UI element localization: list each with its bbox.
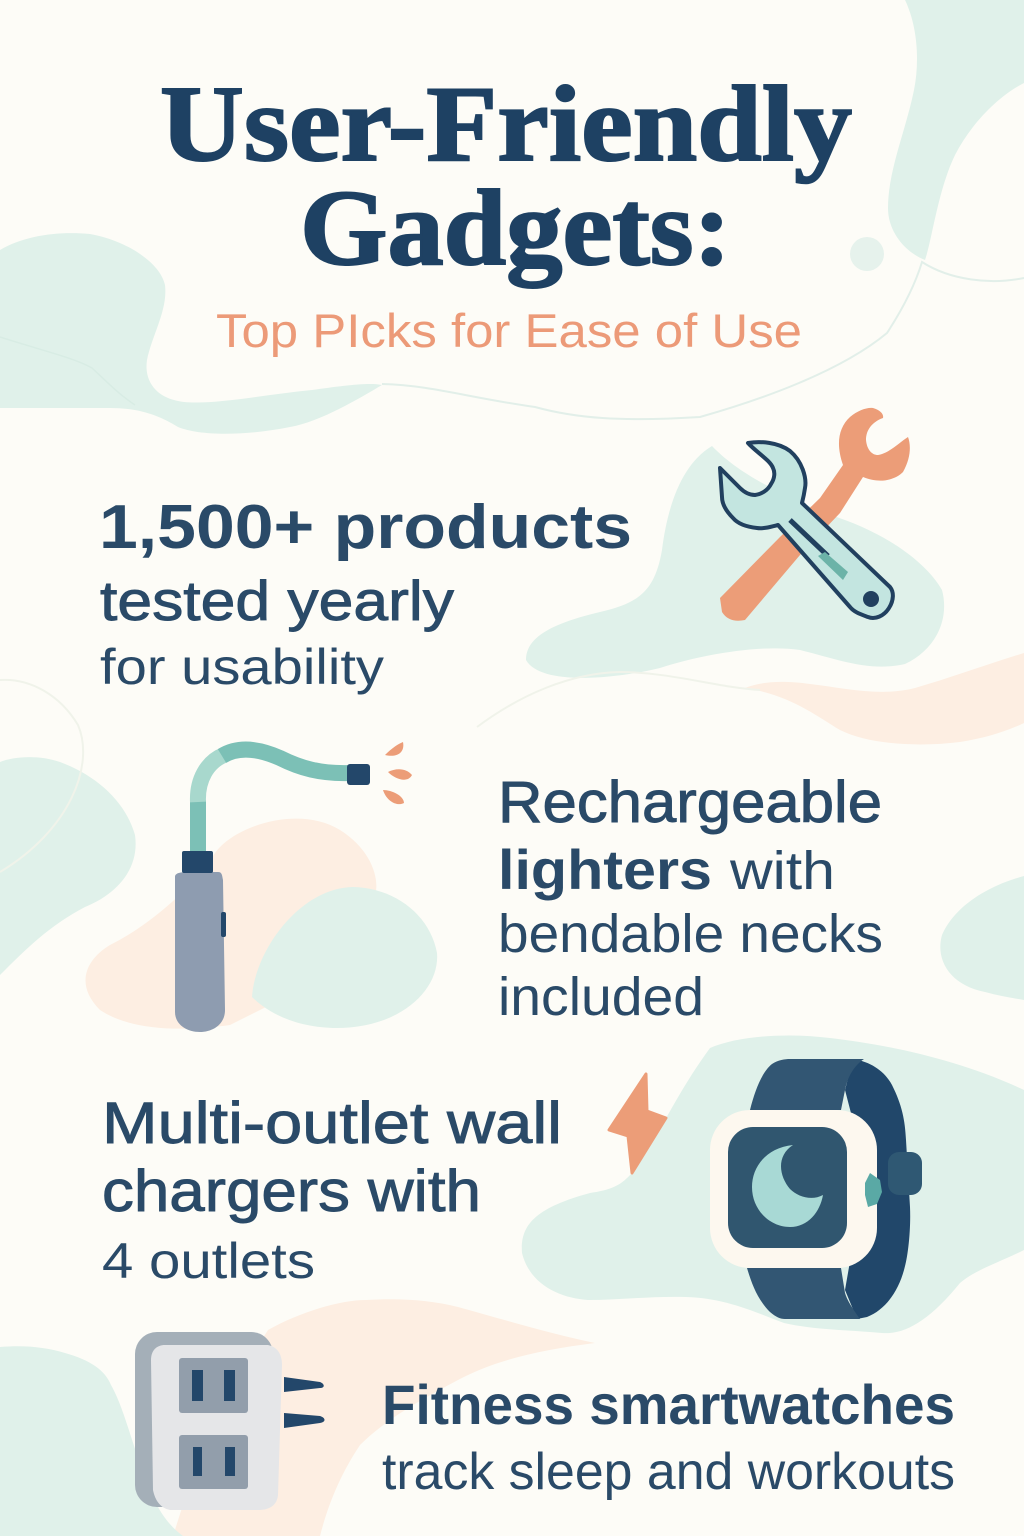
socket slots xyxy=(192,1370,235,1476)
text block: products tested: tested yearly xyxy=(100,569,454,632)
charger front xyxy=(151,1345,282,1510)
title: Gadgets: xyxy=(300,169,731,288)
collar xyxy=(182,851,213,873)
charger back xyxy=(135,1332,273,1507)
handle xyxy=(175,872,225,1032)
lighter tip xyxy=(347,764,370,785)
text block: multi-outlet chargers: Multi-outlet wall xyxy=(102,1091,562,1156)
text block: fitness smartwatches: Fitness smartwatches xyxy=(382,1373,955,1436)
watch screen xyxy=(728,1127,847,1248)
text block: products tested xyxy=(99,493,632,695)
icon: smartwatch xyxy=(710,1059,922,1319)
text block: products tested: 1,500+ products xyxy=(99,493,632,562)
strap back xyxy=(845,1059,910,1319)
text block: fitness smartwatches: track sleep and workouts xyxy=(382,1443,955,1501)
bottom socket xyxy=(179,1435,248,1489)
title xyxy=(160,65,852,288)
text block: rechargeable lighters: with xyxy=(729,841,835,901)
top socket xyxy=(179,1358,248,1413)
subtitle: Top PIcks for Ease of Use xyxy=(216,304,802,357)
orange wrench xyxy=(720,408,910,621)
icon: crossed wrenches xyxy=(720,408,910,621)
text block: rechargeable lighters: lighters xyxy=(498,838,712,901)
button xyxy=(221,912,226,937)
text block: fitness smartwatches xyxy=(382,1373,955,1501)
text block: rechargeable lighters xyxy=(498,770,883,1027)
text block: rechargeable lighters: Rechargeable xyxy=(498,770,882,835)
text block: multi-outlet chargers: chargers with xyxy=(102,1159,481,1224)
sparks xyxy=(383,742,412,804)
strap top xyxy=(750,1059,864,1110)
side button xyxy=(865,1173,882,1207)
moon xyxy=(752,1145,823,1227)
icon: rechargeable lighter xyxy=(175,742,412,1032)
crown xyxy=(888,1152,922,1195)
strap bottom xyxy=(747,1268,860,1319)
watch case xyxy=(710,1110,877,1268)
icon: lightning bolt xyxy=(609,1074,666,1173)
prongs xyxy=(284,1377,324,1428)
text block: rechargeable lighters: included xyxy=(498,967,704,1027)
flexible neck xyxy=(190,800,206,852)
text block: multi-outlet chargers xyxy=(102,1091,562,1289)
text block: products tested: for usability xyxy=(100,639,384,695)
text block: rechargeable lighters: bendable necks xyxy=(498,904,883,964)
title: User-Friendly xyxy=(160,65,852,184)
icon: wall charger xyxy=(135,1332,324,1510)
text block: multi-outlet chargers: 4 outlets xyxy=(102,1233,315,1289)
navy outline wrench xyxy=(720,442,893,618)
